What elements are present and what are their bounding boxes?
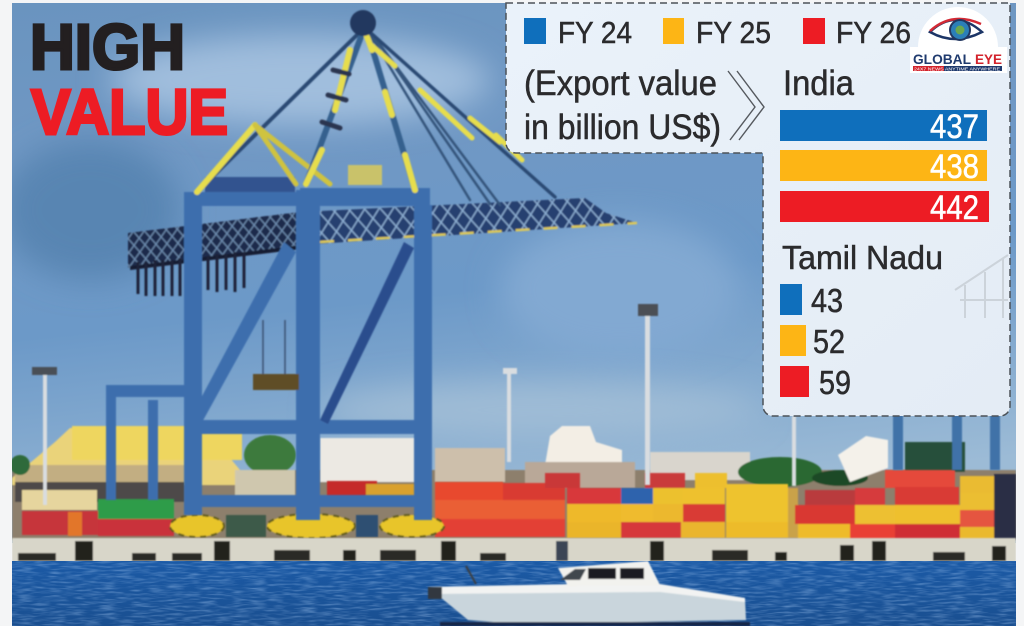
title line: VALUE: VALUE: [31, 76, 228, 148]
legend swatch FY 25: [663, 18, 684, 44]
cabin behind gantry: [205, 177, 295, 192]
light poles: [32, 304, 796, 505]
hanging spreader: [253, 320, 299, 390]
bar Tamil Nadu FY 25: [780, 325, 806, 356]
value 59: 59: [819, 364, 851, 401]
unit note: (Export value: [524, 64, 717, 103]
yellow machinery on quay: [170, 514, 444, 538]
value 437: 437: [930, 108, 979, 146]
logo: Global Eye: [910, 7, 1007, 73]
boom truss: [128, 198, 637, 296]
machinery cabin: [348, 165, 382, 185]
containers: [22, 470, 1016, 542]
bar India FY 25: [780, 150, 987, 181]
Tamil Nadu heading: Tamil Nadu: [782, 239, 943, 276]
legend label FY 25: FY 25: [696, 15, 771, 50]
patrol boat: [428, 561, 750, 626]
logo name: EYE: [975, 51, 1002, 67]
logo name: GLOBAL: [913, 51, 971, 67]
icon: eye: [930, 19, 982, 40]
bar India FY 24: [780, 110, 987, 141]
gantry legs: [106, 188, 432, 520]
value 442: 442: [930, 189, 979, 227]
logo badge: [910, 7, 1007, 73]
title: [30, 11, 228, 148]
faint crane inside panel: [955, 255, 1008, 318]
bar Tamil Nadu FY 24: [780, 284, 802, 315]
quay wall: [12, 538, 1016, 562]
title line: HIGH: HIGH: [30, 11, 185, 83]
value 43: 43: [811, 282, 843, 319]
legend swatch FY 24: [524, 18, 546, 44]
unit note: in billion US$): [524, 108, 721, 147]
crane: main gantry: [32, 10, 1000, 520]
panel: chart background: [506, 3, 1010, 416]
value 52: 52: [813, 323, 845, 360]
icon: double chevron arrow: [728, 71, 764, 140]
section: Tamil Nadu: [780, 239, 943, 401]
bar India FY 26: [780, 191, 989, 222]
legend swatch FY 26: [803, 18, 825, 44]
background buildings: [10, 426, 1016, 540]
sea: [12, 561, 1016, 626]
logo tagline: 24X7 NEWS ANYTIME ANYWHERE: [914, 66, 1000, 72]
value 438: 438: [930, 148, 979, 186]
mast head: [350, 10, 376, 36]
cables and mast: [197, 30, 555, 205]
legend label FY 26: FY 26: [836, 15, 911, 50]
distant crane right: [893, 415, 1000, 470]
section: India: [780, 64, 989, 227]
legend label FY 24: FY 24: [558, 15, 632, 50]
legend: [524, 15, 911, 50]
bar Tamil Nadu FY 26: [780, 366, 809, 397]
India heading: India: [783, 64, 854, 103]
